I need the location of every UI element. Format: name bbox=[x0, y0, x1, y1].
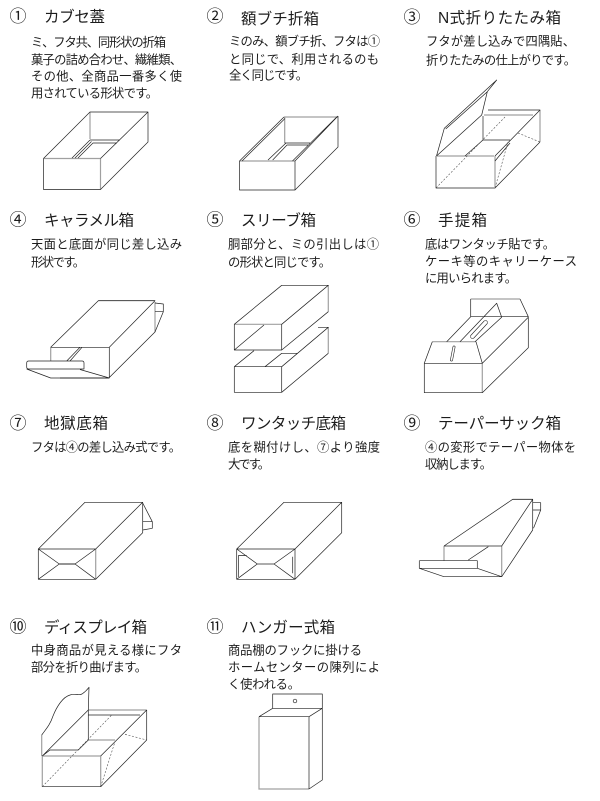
description 3 bbox=[426, 34, 576, 68]
description 11: 商品棚のフックに掛ける bbox=[228, 642, 362, 658]
description 6: 底はワンタッチ貼です。 bbox=[425, 236, 555, 252]
description 8: 底を糊付けし、⑦より強度 bbox=[228, 440, 380, 454]
description 3: 折りたたみの仕上がりです。 bbox=[426, 52, 576, 68]
description 1: 用されている形状です。 bbox=[31, 86, 158, 100]
icon: one-touch bottom box bbox=[237, 502, 342, 579]
description 1 bbox=[31, 34, 182, 100]
heading 3: N式折りたたみ箱 bbox=[438, 9, 561, 27]
icon: sleeve box bbox=[234, 285, 328, 392]
description 9: 収納します。 bbox=[425, 456, 492, 472]
description 10: 部分を折り曲げます。 bbox=[31, 660, 147, 674]
heading 9: テーパーサック箱 bbox=[438, 414, 561, 432]
description 9 bbox=[425, 440, 576, 472]
description 10: 中身商品が見える様にフタ bbox=[31, 642, 182, 658]
heading 2: 額ブチ折箱 bbox=[241, 9, 319, 28]
description 3: フタが差し込みで四隅貼、 bbox=[426, 34, 575, 48]
icon: interlocking bottom box bbox=[38, 502, 152, 579]
description 5: 胴部分と、ミの引出しは① bbox=[228, 238, 379, 252]
number 1: ① bbox=[10, 7, 26, 26]
panel: 5 スリーブ箱 bbox=[206, 210, 379, 392]
icon: carry box with handle bbox=[424, 299, 528, 393]
description 4: 天面と底面が同じ差し込み bbox=[31, 236, 182, 252]
number 3: ③ bbox=[404, 8, 420, 27]
number 10: ⑩ bbox=[10, 618, 26, 636]
description 5: の形状と同じです。 bbox=[228, 256, 331, 270]
panel: 10 ディスプレイ箱 bbox=[10, 618, 182, 787]
description 11 bbox=[228, 642, 380, 692]
description 10 bbox=[31, 642, 182, 674]
icon: frame fold box bbox=[240, 116, 338, 190]
description 6: に用いられます。 bbox=[425, 272, 517, 286]
description 7: フタは④の差し込み式です。 bbox=[31, 440, 181, 454]
panel: 8 ワンタッチ底箱 bbox=[206, 414, 380, 579]
icon: kabuse lid box bbox=[44, 112, 148, 190]
panel: 11 ハンガー式箱 bbox=[206, 618, 380, 789]
panel: 2 額ブチ折箱 bbox=[206, 7, 380, 190]
number 5: ⑤ bbox=[206, 210, 224, 230]
heading 4: キャラメル箱 bbox=[44, 212, 134, 230]
description 1: 菓子の詰め合わせ、繊維類、 bbox=[31, 52, 182, 67]
panel: 3 N式折りたたみ箱 bbox=[404, 8, 576, 188]
description 11: ホームセンターの陳列によ bbox=[228, 660, 380, 674]
heading 11: ハンガー式箱 bbox=[241, 618, 335, 636]
description 6 bbox=[425, 236, 577, 286]
description 8 bbox=[228, 440, 380, 472]
description 8: 大です。 bbox=[228, 458, 270, 472]
description 2: ミのみ、額ブチ折、フタは① bbox=[229, 34, 380, 48]
description 11: く使われる。 bbox=[228, 676, 300, 692]
icon: caramel box bbox=[27, 301, 163, 378]
description 1: ミ、フタ共、同形状の折箱 bbox=[31, 34, 166, 50]
heading 10: ディスプレイ箱 bbox=[44, 618, 147, 636]
heading 5: スリーブ箱 bbox=[241, 210, 316, 230]
number 2: ② bbox=[206, 7, 224, 26]
description 2: と同じで、利用されるのも bbox=[229, 52, 379, 66]
panel: 6 手提箱 bbox=[404, 210, 577, 393]
description 2 bbox=[229, 34, 380, 82]
description 9: ④の変形でテーパー物体を bbox=[425, 440, 576, 454]
description 5 bbox=[228, 238, 379, 270]
panel: 9 テーパーサック箱 bbox=[404, 414, 576, 577]
description 4 bbox=[31, 236, 182, 270]
panel: 4 キャラメル箱 bbox=[10, 210, 182, 378]
panel: 1 カブセ蓋 bbox=[10, 7, 182, 190]
description 4: 形状です。 bbox=[31, 256, 85, 270]
number 11: ⑪ bbox=[206, 618, 224, 636]
icon: N-type folding box bbox=[436, 80, 540, 188]
heading 1: カブセ蓋 bbox=[44, 7, 105, 26]
panel: 7 地獄底箱 bbox=[10, 414, 181, 579]
icon: tapered sack box bbox=[419, 499, 541, 577]
number 7: ⑦ bbox=[10, 414, 26, 433]
heading 8: ワンタッチ底箱 bbox=[241, 414, 346, 432]
icon: display box bbox=[42, 687, 147, 787]
number 4: ④ bbox=[10, 210, 26, 230]
icon: hanger box bbox=[259, 694, 322, 789]
heading 7: 地獄底箱 bbox=[44, 414, 108, 432]
description 2: 全く同じです。 bbox=[229, 68, 308, 82]
heading 6: 手提箱 bbox=[438, 212, 487, 230]
number 6: ⑥ bbox=[404, 210, 420, 230]
description 1: その他、全商品一番多く使 bbox=[31, 68, 182, 84]
number 9: ⑨ bbox=[404, 414, 420, 433]
description 6: ケーキ等のキャリーケース bbox=[425, 254, 577, 268]
number 8: ⑧ bbox=[206, 414, 224, 433]
